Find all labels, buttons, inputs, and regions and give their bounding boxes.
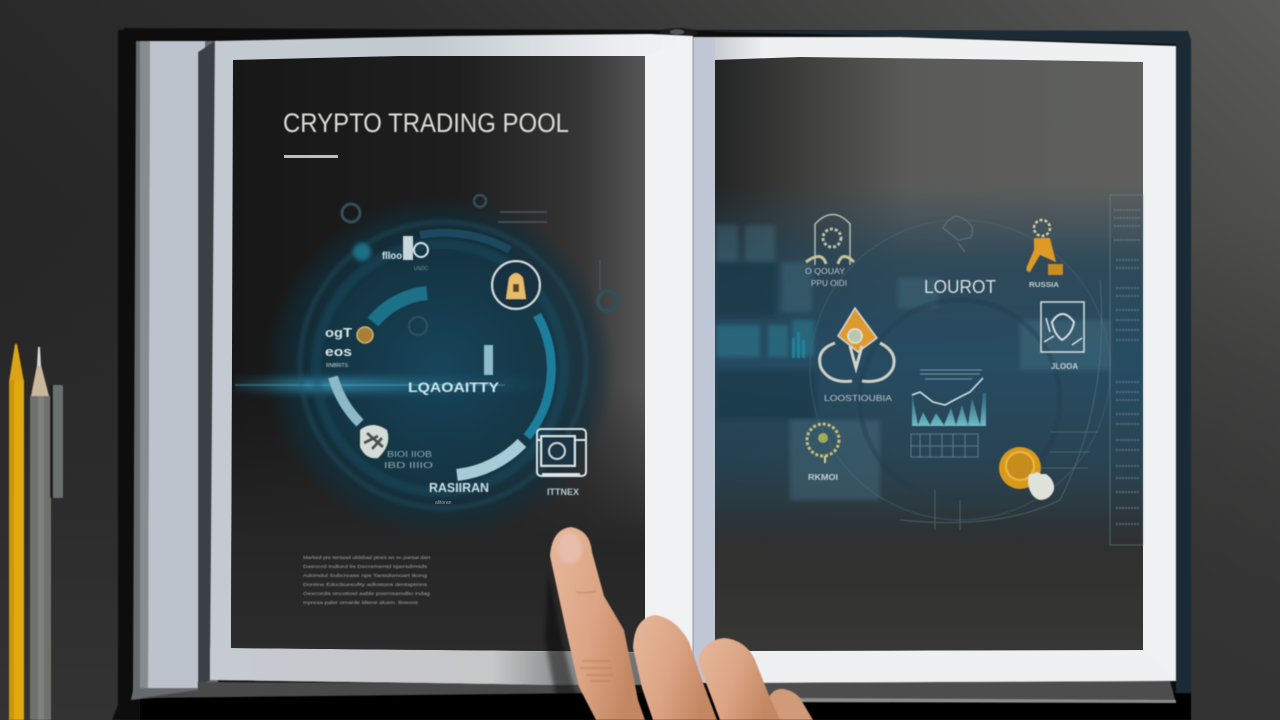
bottom page edges <box>140 680 1176 703</box>
right page <box>693 37 1176 683</box>
temple labels <box>805 267 847 288</box>
bottom ring sublabel: alitoran <box>435 500 452 506</box>
spine ornament <box>659 28 697 38</box>
yellow figure label: RUSSIA <box>1029 282 1059 289</box>
icon: gear coin <box>807 424 839 463</box>
hand: pointing fingers <box>545 527 813 720</box>
map label: JLOOA <box>1051 362 1078 371</box>
top icon cluster with label: flloo <box>382 251 402 262</box>
left stacked label with coin <box>325 325 373 369</box>
index finger <box>550 527 645 720</box>
right centre label: LOUROT <box>924 277 996 297</box>
bar and line chart <box>912 370 986 426</box>
finger shadow <box>545 570 590 720</box>
heading: CRYPTO TRADING POOL <box>283 108 569 138</box>
grey pencil <box>30 347 51 720</box>
small mini chart by ring <box>792 332 805 358</box>
ring segments <box>333 233 551 475</box>
icon: gold padlock badge <box>492 261 540 309</box>
icon: orange diamond ring <box>820 308 894 381</box>
panel: right dark page <box>715 57 1143 651</box>
text block: left page paragraph: Adomdul Subcrease rips Tarstdomoart Ikong <box>303 573 428 578</box>
icon: gold coin with hand <box>999 447 1054 500</box>
icon: yellow figure <box>1026 220 1063 275</box>
icon: pebble token <box>360 425 388 458</box>
ring centre label: LQAOAITTY <box>408 379 500 395</box>
left page stack <box>131 41 218 700</box>
temple labels: O QOUAY <box>805 267 846 276</box>
ring glow <box>235 196 616 540</box>
data table under chart <box>911 434 978 457</box>
text block: left page paragraph: Dontine Educbuesufity adlostons dentaptions <box>303 582 428 587</box>
chart: liquidity ring <box>235 195 618 540</box>
ring finger <box>698 638 780 720</box>
small faint circles <box>342 195 618 335</box>
text block: left page paragraph: Daeocrd Indturd lis Decrementd spersdrmids <box>303 564 428 569</box>
bottom ring label: RASIIRAN <box>429 480 489 495</box>
icon: temple emblem <box>806 214 854 265</box>
outer rings <box>300 222 586 508</box>
small label by pebble: BIOI IIOB <box>387 450 432 459</box>
temple labels: PPU OIDI <box>811 279 847 288</box>
little finger <box>768 689 813 720</box>
faint cloud sketch <box>943 216 973 252</box>
top icon cluster with label <box>382 236 429 272</box>
middle finger <box>633 615 717 720</box>
icon: framed map <box>1041 302 1084 352</box>
gear label: RKMOI <box>808 473 838 482</box>
heading underline <box>284 155 338 158</box>
laptop label: ITTNEX <box>547 487 579 497</box>
text block: left page paragraph: Marked pre tentasd ublsbad pines an oc parsat dart <box>303 555 431 560</box>
background data tiles <box>716 225 1110 500</box>
pencils <box>9 344 63 720</box>
center bar <box>484 345 493 375</box>
icon: laptop frame <box>537 429 586 476</box>
text block: left page paragraph <box>303 555 431 605</box>
faint orbit rings <box>810 220 1110 520</box>
panel: left dark page <box>231 56 645 652</box>
index fingertip highlight <box>558 532 582 564</box>
chart: right page diagram <box>715 185 1143 545</box>
left stacked label with coin: eos <box>325 344 352 359</box>
text block: left page paragraph: mpresa paler ornarde ldiene alusin. Bosoos <box>303 600 419 605</box>
index knuckle creases <box>576 591 614 681</box>
blue wash across the page <box>715 185 1143 545</box>
top right tiny lines <box>498 212 600 290</box>
top icon cluster with label: USDC <box>414 266 429 272</box>
left stacked label with coin: ogT <box>325 325 352 340</box>
yellow pencil <box>9 344 24 720</box>
faint lower chart lines <box>900 280 1102 530</box>
small label by pebble, second line: IBD IIIIO <box>384 461 433 470</box>
diamond ring label: LOOSTIOUBIA <box>824 394 893 403</box>
left stacked label with coin: RNBRITS <box>326 363 349 369</box>
text block: left page paragraph: Oexcordis encotioid aable poernsamdlio indag <box>303 591 431 596</box>
teal blob <box>353 243 371 261</box>
grey eraser bar <box>50 385 63 498</box>
left page <box>210 34 693 685</box>
side data strip <box>1110 195 1143 545</box>
